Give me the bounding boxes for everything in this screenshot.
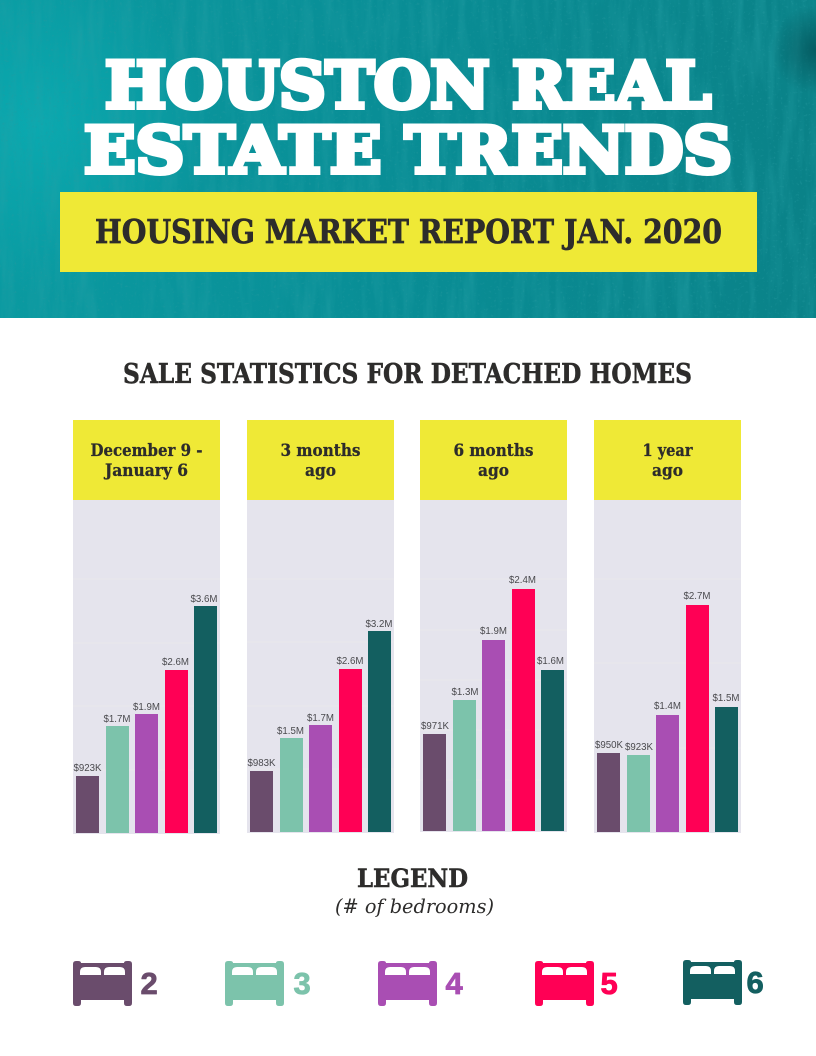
- legend item: 3 bedrooms: 3: [294, 966, 311, 1001]
- panel header: 6 months: [454, 441, 534, 461]
- icon: bed: [73, 961, 132, 1006]
- title: ESTATE TRENDS: [84, 114, 732, 188]
- bar chart: $971K: [421, 721, 450, 732]
- section heading: SALE STATISTICS FOR DETACHED HOMES: [123, 359, 692, 390]
- subtitle banner: [60, 192, 757, 272]
- panel header: ago: [652, 461, 683, 481]
- panel header: [594, 420, 741, 500]
- panel: 1 year ago: [594, 420, 741, 833]
- panel header: January 6: [103, 461, 188, 481]
- legend item: 2 bedrooms: 2: [140, 966, 158, 1001]
- legend item: 6 bedrooms: [683, 960, 764, 1005]
- legend item: 3 bedrooms: [225, 961, 311, 1006]
- panel header: ago: [478, 461, 509, 481]
- bar chart: $1.3M: [452, 687, 478, 698]
- bar chart: $2.4M: [509, 575, 536, 586]
- legend heading: (# of bedrooms): [335, 894, 494, 918]
- legend item: 5 bedrooms: 5: [600, 966, 618, 1001]
- bar chart: $923K: [625, 742, 654, 753]
- panel header: [73, 420, 220, 500]
- legend heading: LEGEND: [357, 864, 468, 893]
- legend item: 2 bedrooms: [73, 961, 158, 1006]
- bar chart: $2.6M: [162, 657, 189, 668]
- bar chart: [421, 575, 564, 831]
- panel: December 9 - January 6: [73, 420, 220, 834]
- panel header: 3 months: [280, 441, 360, 461]
- bar chart: $2.7M: [684, 591, 710, 602]
- panel header: 1 year: [642, 441, 693, 461]
- panel header: ago: [305, 461, 336, 481]
- bar chart: $1.7M: [104, 714, 130, 725]
- bar chart: $2.6M: [337, 656, 363, 667]
- bar chart: $3.2M: [366, 619, 392, 630]
- bar chart: [595, 591, 739, 832]
- icon: bed: [378, 961, 437, 1006]
- bar chart: [73, 594, 217, 833]
- legend item: 5 bedrooms: [535, 961, 618, 1006]
- bar chart: [247, 619, 392, 832]
- panel header: [247, 420, 394, 500]
- bar chart: $3.6M: [191, 594, 217, 605]
- panel header: [420, 420, 567, 500]
- subtitle banner: HOUSING MARKET REPORT JAN. 2020: [95, 212, 722, 251]
- title: [84, 48, 732, 188]
- bar chart: $1.5M: [277, 726, 304, 737]
- panel header: December 9 -: [90, 441, 202, 461]
- icon: bed: [683, 960, 742, 1005]
- bar chart: $923K: [73, 763, 102, 774]
- bar chart: $1.9M: [480, 626, 507, 637]
- panel: 3 months ago: [247, 420, 394, 833]
- bar chart: $983K: [247, 758, 276, 769]
- bar chart: $950K: [595, 740, 624, 751]
- bar chart: $1.5M: [713, 693, 739, 704]
- bar chart: $1.9M: [133, 702, 160, 713]
- legend item: 4 bedrooms: [378, 961, 464, 1006]
- icon: bed: [535, 961, 594, 1006]
- legend item: 6 bedrooms: 6: [746, 965, 764, 1000]
- title: HOUSTON REAL: [105, 48, 711, 124]
- legend heading: [335, 864, 494, 918]
- bar chart: $1.7M: [307, 713, 334, 724]
- bar chart: $1.6M: [537, 656, 564, 667]
- bar chart: $1.4M: [654, 701, 681, 712]
- header banner: teal textured background: [0, 0, 816, 318]
- legend item: 4 bedrooms: 4: [446, 966, 464, 1001]
- icon: bed: [225, 961, 284, 1006]
- panel: 6 months ago: [420, 420, 567, 832]
